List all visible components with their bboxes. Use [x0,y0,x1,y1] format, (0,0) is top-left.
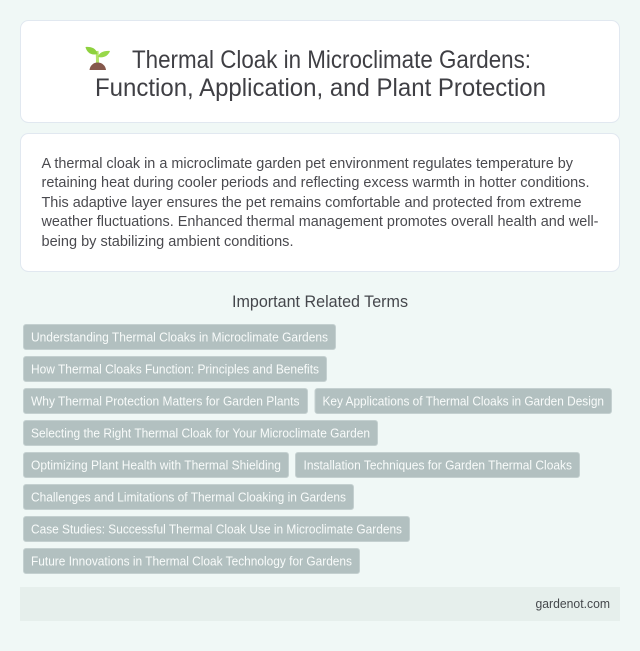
title: Thermal Cloak in Microclimate Gardens: [132,46,531,74]
footer source text: gardenot.com [536,596,610,611]
tag: key applications: Key Applications of Thermal Cloaks in Garden Design [322,394,604,408]
tag: understanding [24,324,336,350]
footer bar [20,587,620,621]
title [95,46,546,102]
description text: A thermal cloak in a microclimate garden pet environment regulates temperature by [42,155,573,172]
description text: being by stabilizing ambient conditions. [42,233,294,250]
tag: optimizing [24,452,288,478]
tag: why protection matters: Why Thermal Protection Matters for Garden Plants [31,394,300,408]
tag: challenges: Challenges and Limitations of Thermal Cloaking in Gardens [31,490,346,504]
tag: key applications [315,388,612,414]
tag: how they function: How Thermal Cloaks Function: Principles and Benefits [31,362,319,376]
tag: optimizing: Optimizing Plant Health with Thermal Shielding [31,458,281,472]
tag: installation [296,452,580,478]
tag: selecting [24,420,378,446]
tag: how they function [24,356,326,382]
tag: case studies [24,516,410,542]
icon: seedling [86,47,110,70]
tag: case studies: Case Studies: Successful Thermal Cloak Use in Microclimate Gardens [31,522,402,536]
title: Function, Application, and Plant Protection [95,74,546,102]
tag: future innovations [24,548,360,574]
tag: selecting: Selecting the Right Thermal Cloak for Your Microclimate Garden [31,426,370,440]
panel: description [20,134,620,272]
tag: why protection matters [24,388,308,414]
tag: understanding: Understanding Thermal Cloaks in Microclimate Gardens [31,330,328,344]
tag: challenges [24,484,354,510]
description text [41,155,598,250]
description text: weather fluctuations. Enhanced thermal management promotes overall health and well- [41,213,598,230]
tag: installation: Installation Techniques for Garden Thermal Cloaks [304,458,572,472]
tag: future innovations: Future Innovations in Thermal Cloak Technology for Gardens [31,554,352,568]
description text: retaining heat during cooler periods and reflecting excess warmth in hotter conditions. [42,174,590,191]
description text: This adaptive layer ensures the pet remains comfortable and protected from extreme [42,194,582,211]
panel: title card [20,20,620,122]
heading: related terms: Important Related Terms [232,293,408,311]
